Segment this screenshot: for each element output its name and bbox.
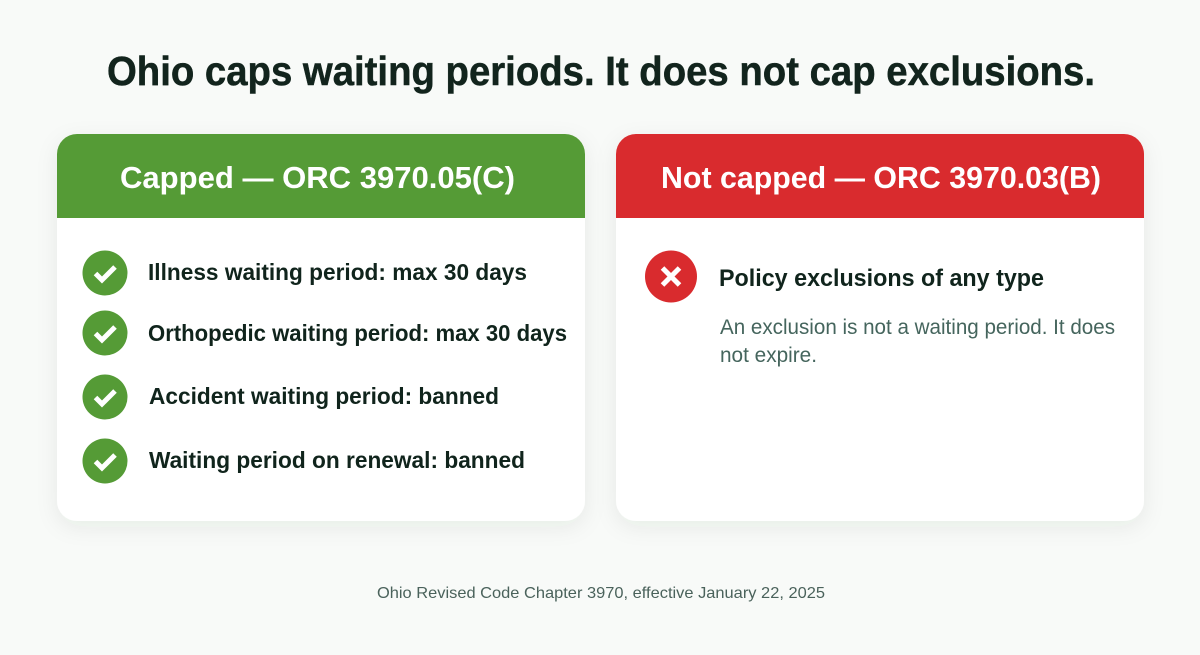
body text: exclusion explanation: not expire. [720,344,817,367]
item: orthopedic waiting period [82,310,567,356]
body text: exclusion explanation [720,316,1115,367]
title: Ohio caps waiting periods. It does not cap exclusions. [107,48,1095,94]
item: illness waiting period: Illness waiting period: max 30 days [148,259,527,285]
body text: exclusion explanation: An exclusion is not a waiting period. It does [720,316,1115,339]
panel header: not capped [616,134,1144,218]
panel header: capped [57,134,585,218]
item: illness waiting period [82,250,527,296]
panel: not capped [616,134,1144,521]
item heading: policy exclusions: Policy exclusions of any type [719,265,1044,292]
footer source note: Ohio Revised Code Chapter 3970, effective January 22, 2025 [377,585,825,602]
panel header: not capped: Not capped — ORC 3970.03(B) [661,160,1101,195]
item: accident waiting period: Accident waiting period: banned [149,383,499,409]
icon: red cross [645,250,697,302]
item: waiting period on renewal [82,438,525,484]
item: accident waiting period [82,374,499,420]
panel header: capped: Capped — ORC 3970.05(C) [120,160,515,195]
item: orthopedic waiting period: Orthopedic waiting period: max 30 days [148,320,567,346]
panel: capped [57,134,585,521]
item: waiting period on renewal: Waiting period on renewal: banned [149,447,525,473]
